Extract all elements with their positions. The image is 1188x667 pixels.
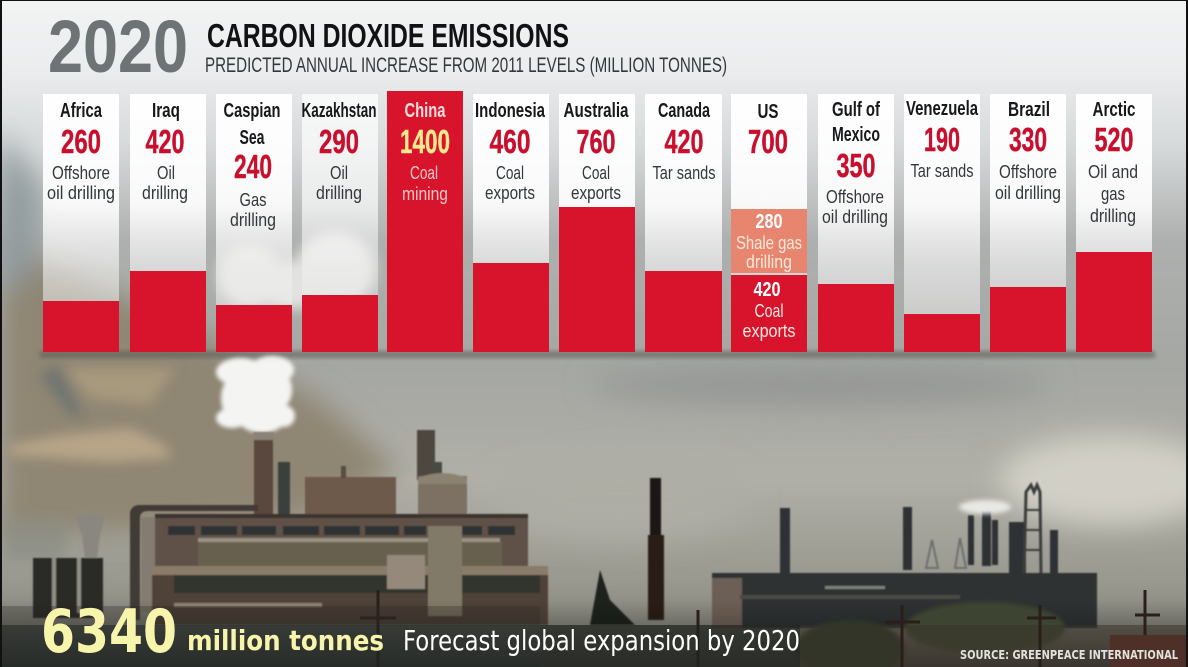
panel: Caspian Sea: Gas [240,190,266,210]
panel: Arctic: Arctic [1092,99,1136,121]
stacked label: coal exports: Coal [754,301,784,321]
panel: Brazil: 330 [1009,121,1047,158]
total description: Forecast global expansion by 2020 [403,624,800,657]
panel: Arctic: 520 [1094,121,1134,158]
panel: Caspian Sea [216,94,375,352]
stacked label: shale gas [736,211,802,272]
panel: Indonesia: Indonesia [475,100,546,122]
panel: Indonesia [473,94,549,352]
panel: Brazil: Offshore [999,162,1057,182]
panel: Venezuela [904,94,980,352]
panel: Kazakhstan [302,94,378,352]
left factory silhouette [33,430,548,625]
shadow under the bars [40,351,1155,358]
panel: Australia: Australia [564,100,629,122]
panel: Kazakhstan: Oil [330,163,348,183]
panel: US [731,94,807,352]
smoke over panels [218,232,375,309]
panel: China: 1400 [400,123,450,160]
panel: Kazakhstan: Kazakhstan [302,100,376,122]
panel: Australia: exports [571,183,621,203]
callout: global total [41,597,800,667]
panel: Canada: 420 [664,123,704,160]
panel: Venezuela: Venezuela [906,98,979,120]
panel: Iraq [130,94,206,352]
white smoke plume [216,356,295,433]
panel: Australia: 760 [576,123,616,160]
stacked label: shale gas: 280 [756,211,782,233]
panel: Africa: oil drilling [47,183,115,203]
panel: Caspian Sea: 240 [234,148,272,185]
panel: China: China [404,100,446,122]
panel: Venezuela: Tar sands [910,161,974,181]
panel: Iraq: Iraq [152,100,180,122]
panel: Africa: Africa [60,100,103,122]
subtitle: PREDICTED ANNUAL INCREASE FROM 2011 LEVELS (MILLION TONNES) [205,54,727,77]
panel: Australia: Coal [582,163,610,183]
panel: Indonesia: exports [485,183,535,203]
panel: US: US [758,101,778,123]
panel: Gulf of Mexico: Gulf of [832,99,880,121]
panel: Arctic [1076,94,1152,352]
panel: Kazakhstan: 290 [319,123,359,160]
panel: Indonesia: Coal [496,163,524,183]
panel: Gulf of Mexico: oil drilling [822,207,888,227]
panel: China: mining [402,184,448,204]
panel: Gulf of Mexico: Mexico [832,124,880,146]
foreground: trees, ground and poles [0,590,1188,667]
total unit: million tonnes [187,624,384,657]
main heading: CARBON DIOXIDE EMISSIONS [207,17,569,54]
bar chart: emissions by region [43,91,1152,352]
panel: Canada: Tar sands [652,163,716,183]
panel: Iraq: drilling [142,183,188,203]
total value: 6340 [41,597,177,667]
panel: China [387,91,463,352]
panel: US: 700 [748,123,788,160]
stacked label: shale gas: drilling [746,252,792,272]
stacked label: coal exports: exports [742,321,796,341]
panel: China: Coal [410,163,438,183]
panel: Caspian Sea: Caspian [224,100,280,122]
right factory silhouette [590,478,1097,628]
panel: Canada [645,94,722,352]
panel: Indonesia: 460 [490,123,530,160]
stacked label: coal exports: 420 [754,279,780,301]
panel: Caspian Sea: drilling [230,210,276,230]
panel: Gulf of Mexico: Offshore [826,187,884,207]
panel: Africa: Offshore [52,163,110,183]
panel: Canada: Canada [658,100,711,122]
stacked label: shale gas: Shale gas [736,233,802,253]
panel: Arctic: drilling [1090,206,1136,226]
panel: Australia [559,94,635,352]
panel: Iraq: 420 [146,123,184,160]
stacked label: coal exports [742,279,796,341]
title block [48,5,727,88]
panel: Gulf of Mexico [818,94,894,352]
panel: Arctic: gas [1101,184,1125,204]
panel: Brazil: oil drilling [995,183,1061,203]
panel: Africa: 260 [61,123,101,160]
panel: Caspian Sea: Sea [240,127,265,149]
panel: Venezuela: 190 [924,121,960,158]
panel: Iraq: Oil [157,163,175,183]
year heading: 2020 [48,5,188,88]
panel: Brazil: Brazil [1008,99,1050,121]
panel: Gulf of Mexico: 350 [836,147,876,184]
panel: Africa [43,94,119,352]
panel: Brazil [990,94,1066,352]
panel: Arctic: Oil and [1088,162,1138,182]
panel: Kazakhstan: drilling [316,183,362,203]
